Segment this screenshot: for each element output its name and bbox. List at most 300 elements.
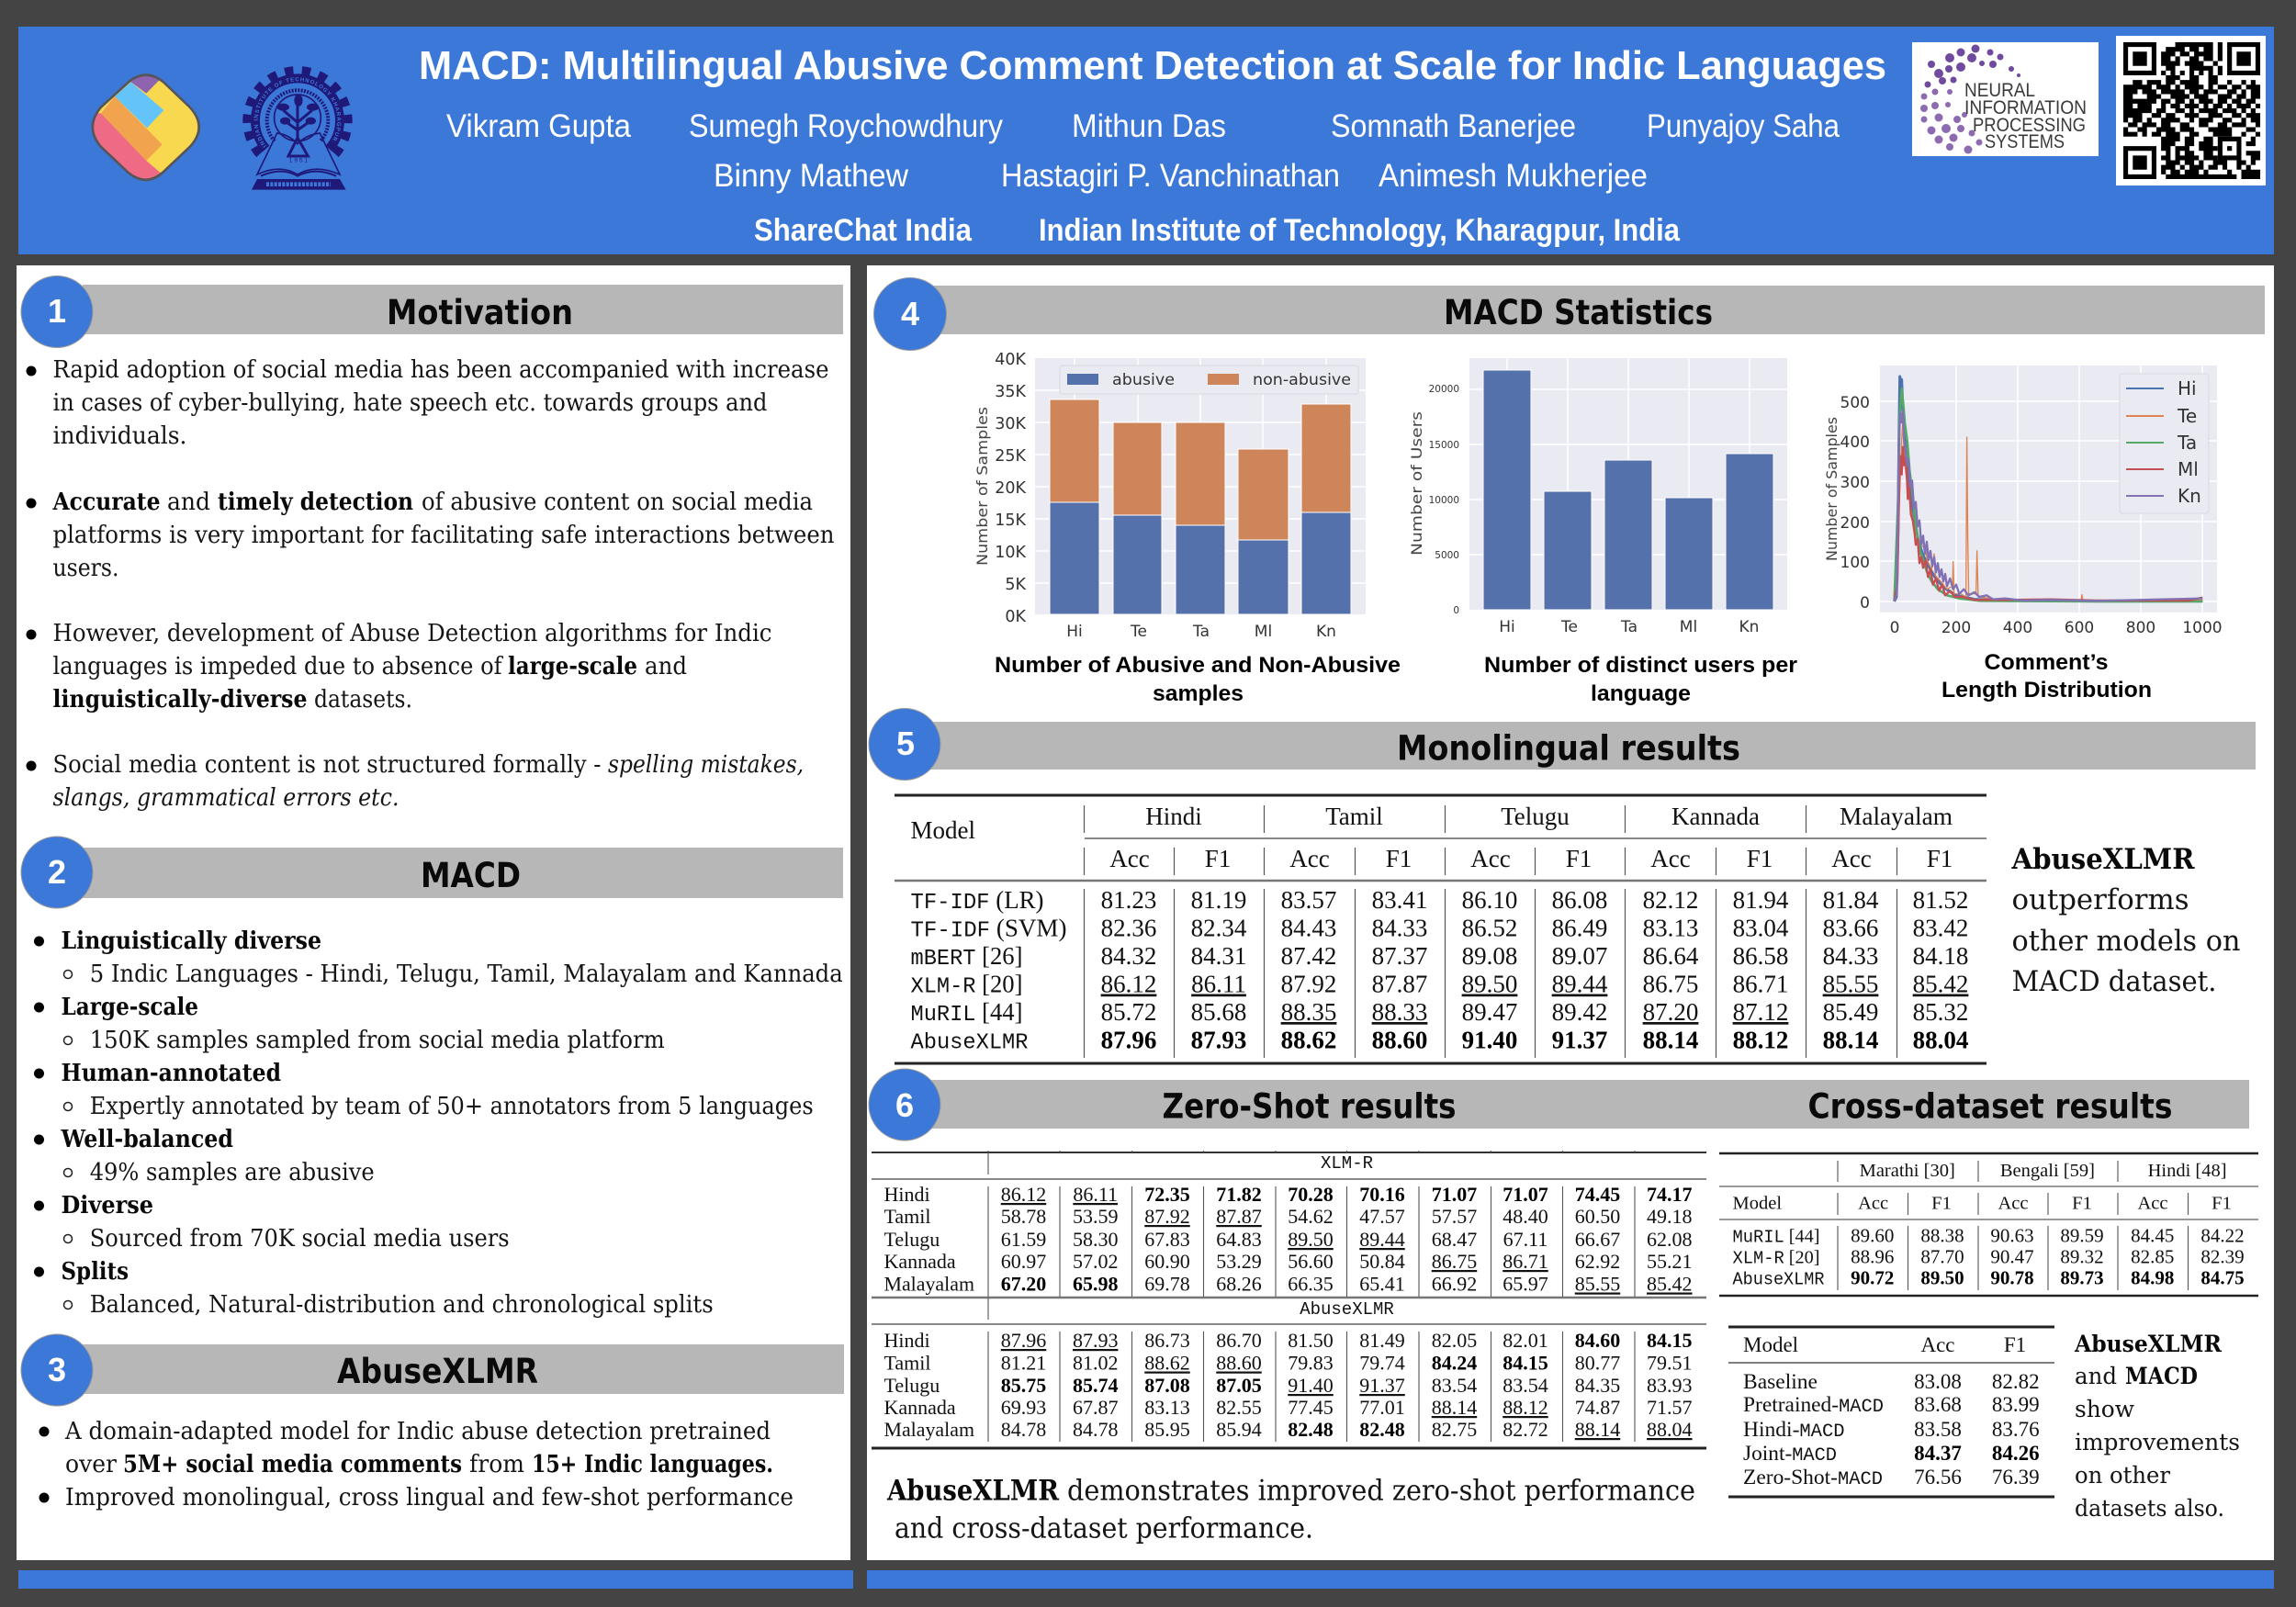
table: zero-shot results: 88.12 (1503, 1396, 1548, 1419)
authors: Vikram Gupta (446, 108, 631, 144)
table: monolingual results: 81.19 (1191, 886, 1246, 914)
chart: distinct users per language: 0 (1453, 605, 1459, 616)
chart: comment length distribution: Number of Samples (1823, 417, 1840, 561)
chart: comment length distribution (1823, 365, 2223, 702)
table: zero-shot results: 77.45 (1288, 1396, 1334, 1419)
MACD properties list: Diverse (61, 1191, 153, 1219)
section 1 heading: 1 (48, 292, 66, 330)
table: zero-shot results: 85.74 (1073, 1374, 1118, 1397)
table: cross-dataset results: AbuseXLMR (1732, 1269, 1824, 1289)
table: monolingual results: 85.32 (1913, 998, 1968, 1026)
motivation bullets: languages is impeded due to absence of (53, 652, 503, 680)
table: zero-shot results: 74.45 (1575, 1183, 1620, 1206)
table: zero-shot results: 58.30 (1073, 1228, 1118, 1251)
table: cross-dataset results: Acc (1998, 1194, 2029, 1214)
table: zero-shot results: 82.48 (1288, 1418, 1334, 1441)
table: zero-shot results: 68.26 (1216, 1273, 1262, 1295)
table: MACD training variants: Pretrained-MACD (1743, 1393, 1884, 1418)
table: zero-shot results: 49.18 (1647, 1205, 1693, 1228)
table: zero-shot results: 91.40 (1288, 1374, 1334, 1397)
table: monolingual results: F1 (1566, 845, 1592, 872)
table: zero-shot results (872, 1151, 1706, 1448)
motivation bullets: Accurate (52, 488, 161, 516)
table: monolingual results: 83.41 (1372, 886, 1427, 914)
table: zero-shot results: 88.04 (1647, 1418, 1693, 1441)
chart: distinct users per language: language (1591, 681, 1691, 706)
table: monolingual results: 87.92 (1281, 970, 1336, 997)
title: MACD: Multilingual Abusive Comment Detection at Scale for Indic Languages (419, 43, 1886, 88)
table: monolingual results (895, 795, 1986, 1063)
chart: distinct users per language: 10000 (1429, 495, 1459, 506)
table: zero-shot results: 60.90 (1144, 1250, 1190, 1273)
chart: distinct users per language: Ml (1680, 618, 1697, 636)
chart: distinct users per language: 5000 (1435, 550, 1459, 561)
table: cross-dataset results: 84.75 (2200, 1267, 2245, 1289)
chart: comment length distribution: 0 (1890, 619, 1899, 637)
table: zero-shot results: 83.93 (1647, 1374, 1693, 1397)
chart: comment length distribution: 400 (1840, 433, 1870, 452)
table: cross-dataset results: Model (1732, 1194, 1782, 1214)
table: zero-shot results: 81.21 (1001, 1352, 1046, 1374)
table: monolingual results: AbuseXLMR (911, 1030, 1029, 1056)
table: monolingual results: 86.52 (1462, 915, 1517, 942)
AbuseXLMR bullets: over (65, 1450, 117, 1478)
table: monolingual results: 84.18 (1913, 942, 1968, 970)
authors: Binny Mathew (714, 158, 909, 194)
table: zero-shot results: 87.92 (1144, 1205, 1190, 1228)
table: monolingual results: F1 (1927, 845, 1953, 872)
table: zero-shot results: 64.83 (1216, 1228, 1262, 1251)
section 2 heading: 2 (48, 853, 66, 891)
authors: Sumegh Roychowdhury (689, 108, 1003, 144)
table: monolingual results: F1 (1747, 845, 1773, 872)
icon: QR code (2116, 36, 2266, 185)
table: zero-shot results: 86.70 (1216, 1329, 1262, 1352)
table: zero-shot results: 54.62 (1288, 1205, 1334, 1228)
AbuseXLMR bullets: 5M+ social media comments (123, 1450, 462, 1478)
table: cross-dataset results: 89.32 (2060, 1245, 2104, 1267)
text: zero-shot takeaway: demonstrates improved zero-shot performance (1067, 1475, 1695, 1508)
chart legend: Ml (2178, 458, 2199, 480)
section 3 heading (21, 1334, 844, 1406)
table: MACD training variants: Zero-Shot-MACD (1743, 1466, 1883, 1490)
text: zero-shot takeaway: AbuseXLMR (886, 1475, 1059, 1508)
panel: right column (867, 265, 2274, 1560)
motivation bullets: and (645, 652, 687, 680)
motivation bullets: of abusive content on social media (422, 488, 813, 516)
table: zero-shot results: 81.50 (1288, 1329, 1334, 1352)
table: zero-shot results: 87.08 (1144, 1374, 1190, 1397)
table: monolingual results: Model (911, 816, 975, 844)
authors: Hastagiri P. Vanchinathan (1001, 158, 1340, 194)
table: zero-shot results: 85.55 (1575, 1273, 1620, 1295)
table: monolingual results: 84.33 (1823, 942, 1878, 970)
table: zero-shot results: 72.35 (1144, 1183, 1190, 1206)
table: monolingual results: Malayalam (1840, 803, 1953, 830)
chart: comment length distribution: 0 (1860, 594, 1870, 612)
chart: abusive and non-abusive samples: samples (1153, 681, 1244, 706)
chart: distinct users per language: Number of distinct users per (1484, 653, 1797, 678)
table: zero-shot results: Tamil (884, 1205, 931, 1228)
section 3 heading: AbuseXLMR (337, 1352, 538, 1391)
table: monolingual results: 87.87 (1372, 970, 1427, 997)
table: zero-shot results: 88.14 (1432, 1396, 1477, 1419)
table: zero-shot results: 74.87 (1575, 1396, 1620, 1419)
table: zero-shot results: 66.35 (1288, 1273, 1334, 1295)
table: MACD training variants: 76.56 (1914, 1466, 1962, 1489)
table: MACD training variants (1728, 1327, 2054, 1497)
table: monolingual results: 85.72 (1101, 998, 1156, 1026)
authors: Punyajoy Saha (1647, 108, 1840, 144)
chart: distinct users per language: Kn (1739, 618, 1759, 636)
authors: Somnath Banerjee (1331, 108, 1576, 144)
icon: NeurIPS logo: NEURAL (1964, 80, 2035, 101)
affiliations (754, 213, 1681, 248)
table: zero-shot results: Telugu (884, 1374, 940, 1397)
chart: abusive and non-abusive samples: 40K (995, 351, 1027, 369)
chart: abusive and non-abusive samples: 15K (995, 511, 1027, 530)
table: zero-shot results: 82.01 (1503, 1329, 1548, 1352)
motivation bullets: linguistically-diverse (53, 685, 307, 714)
table: zero-shot results: 82.55 (1216, 1396, 1262, 1419)
chart: comment length distribution: 300 (1840, 474, 1870, 492)
chart: abusive and non-abusive samples: Ml (1255, 623, 1272, 641)
motivation bullets: Social media content is not structured formally - (53, 750, 601, 779)
motivation bullets: spelling mistakes, (608, 750, 804, 779)
table: monolingual results: 91.37 (1552, 1027, 1607, 1054)
table: zero-shot results: 68.47 (1432, 1228, 1477, 1251)
table: monolingual results: 86.11 (1191, 970, 1246, 997)
table: monolingual results: 82.34 (1191, 915, 1247, 942)
table: zero-shot results: 89.44 (1359, 1228, 1405, 1251)
chart: distinct users per language: 15000 (1429, 440, 1459, 451)
footer bar: left (18, 1570, 853, 1589)
table: monolingual results: 88.14 (1823, 1027, 1878, 1054)
chart: comment length distribution: Length Distribution (1941, 678, 2152, 702)
chart: distinct users per language: 20000 (1429, 384, 1459, 395)
table: MACD training variants: Hindi-MACD (1743, 1418, 1844, 1443)
table: cross-dataset results: 89.50 (1920, 1267, 1964, 1289)
table: zero-shot results: 66.67 (1575, 1228, 1620, 1251)
table: zero-shot results: 60.97 (1001, 1250, 1046, 1273)
table: monolingual results: 88.14 (1643, 1027, 1698, 1054)
table: monolingual results: 88.12 (1733, 1027, 1788, 1054)
table: MACD training variants: Joint-MACD (1743, 1442, 1837, 1467)
chart: abusive and non-abusive samples: Number of Samples (974, 407, 991, 566)
chart: distinct users per language (1408, 358, 1797, 706)
table: monolingual results: 86.58 (1733, 942, 1788, 970)
table: monolingual results: 83.13 (1643, 915, 1698, 942)
chart: comment length distribution: 800 (2126, 619, 2155, 637)
table: zero-shot results: 84.15 (1503, 1352, 1548, 1374)
chart: abusive and non-abusive samples: Hi (1066, 623, 1083, 641)
table: monolingual results: Acc (1470, 845, 1511, 872)
motivation bullets: and (167, 488, 210, 516)
table: monolingual results: 89.08 (1462, 942, 1517, 970)
motivation bullets: platforms is very important for facilitating safe interactions between (53, 521, 834, 549)
table: cross-dataset results: 84.22 (2200, 1225, 2245, 1247)
table: monolingual results: 89.47 (1462, 998, 1517, 1026)
chart: comment length distribution: Comment’s (1984, 650, 2109, 675)
table: zero-shot results: 86.75 (1432, 1250, 1477, 1273)
table: MACD training variants: 84.37 (1914, 1442, 1962, 1465)
table: MACD training variants: Model (1743, 1333, 1798, 1356)
table: zero-shot results: 69.78 (1144, 1273, 1190, 1295)
table: zero-shot results: 71.82 (1216, 1183, 1262, 1206)
table: cross-dataset results: 89.59 (2060, 1225, 2104, 1247)
section 2 heading: MACD (421, 856, 521, 895)
table: cross-dataset results: 82.85 (2131, 1245, 2174, 1267)
chart: comment length distribution: 500 (1840, 394, 1870, 412)
icon: IIT Kharagpur emblem: INDIAN INSTITUTE OF TECHNOLOGY KHARAGPUR (253, 77, 342, 148)
MACD properties list: Large-scale (61, 993, 198, 1021)
table: cross-dataset results: 89.73 (2060, 1267, 2104, 1289)
chart: abusive and non-abusive samples: 0K (1005, 608, 1027, 626)
table: zero-shot results: 65.98 (1073, 1273, 1118, 1295)
MACD properties list: Expertly annotated by team of 50+ annotators from 5 languages (90, 1092, 814, 1120)
table: zero-shot results: 84.15 (1647, 1329, 1693, 1352)
table: zero-shot results: 70.28 (1288, 1183, 1334, 1206)
table: monolingual results: 88.60 (1372, 1027, 1427, 1054)
text: zero-shot takeaway: and cross-dataset performance. (895, 1511, 1313, 1545)
table: monolingual results: 89.42 (1552, 998, 1607, 1026)
chart: abusive and non-abusive samples: Te (1130, 623, 1147, 641)
table: monolingual results: Acc (1289, 845, 1330, 872)
table: zero-shot results: 60.50 (1575, 1205, 1620, 1228)
table: monolingual results: 81.23 (1101, 886, 1156, 914)
table: cross-dataset results: Hindi [48] (2148, 1161, 2227, 1181)
table: monolingual results: XLM-R [20] (911, 970, 1023, 999)
authors: Animesh Mukherjee (1379, 158, 1648, 194)
table: zero-shot results: 57.02 (1073, 1250, 1118, 1273)
table: MACD training variants: 83.58 (1914, 1418, 1962, 1441)
chart legend: Hi (2178, 377, 2197, 399)
table: zero-shot results: Telugu (884, 1228, 940, 1251)
section 6 heading: Cross-dataset results (1807, 1087, 2173, 1126)
table: zero-shot results: 85.94 (1216, 1418, 1262, 1441)
table: zero-shot results: 55.21 (1647, 1250, 1693, 1273)
table: zero-shot results: 67.83 (1144, 1228, 1190, 1251)
chart: abusive and non-abusive samples: 5K (1005, 576, 1027, 594)
table: zero-shot results: Tamil (884, 1352, 931, 1374)
table: monolingual results: mBERT [26] (911, 942, 1023, 972)
section 6 heading: 6 (895, 1086, 914, 1124)
MACD properties list: 150K samples sampled from social media platform (90, 1026, 665, 1054)
table: cross-dataset results: 90.78 (1990, 1267, 2034, 1289)
text: cross-dataset takeaway: show (2075, 1396, 2135, 1422)
table: cross-dataset results: 90.47 (1990, 1245, 2034, 1267)
table: zero-shot results: 88.14 (1575, 1418, 1620, 1441)
table: zero-shot results: 50.84 (1359, 1250, 1405, 1273)
table: MACD training variants: 83.99 (1992, 1393, 2040, 1416)
section 4 heading: MACD Statistics (1444, 293, 1713, 332)
chart: abusive and non-abusive samples: 10K (995, 544, 1027, 562)
table: zero-shot results: 69.93 (1001, 1396, 1046, 1419)
table: monolingual results: Acc (1109, 845, 1150, 872)
table: monolingual results: Telugu (1501, 803, 1570, 830)
table: monolingual results: 86.49 (1552, 915, 1607, 942)
table: monolingual results: 85.55 (1823, 970, 1878, 997)
chart: abusive and non-abusive samples: 30K (995, 415, 1027, 433)
table: cross-dataset results: 84.98 (2131, 1267, 2174, 1289)
table: zero-shot results: 48.40 (1503, 1205, 1548, 1228)
chart legend: abusive (1112, 371, 1175, 389)
table: cross-dataset results: 90.63 (1990, 1225, 2034, 1247)
table: monolingual results: Acc (1650, 845, 1691, 872)
section 1 heading: Motivation (387, 293, 573, 332)
table: zero-shot results: 82.05 (1432, 1329, 1477, 1352)
table: monolingual results: 86.71 (1733, 970, 1788, 997)
AbuseXLMR bullets: from (469, 1450, 524, 1478)
table: monolingual results: TF-IDF (SVM) (911, 915, 1067, 944)
table: cross-dataset results: 88.96 (1851, 1245, 1894, 1267)
section 5 heading (869, 709, 2256, 781)
table: cross-dataset results: 88.38 (1920, 1225, 1964, 1247)
chart: abusive and non-abusive samples (974, 351, 1401, 706)
table: monolingual results: 89.50 (1462, 970, 1517, 997)
table: zero-shot results: 86.12 (1001, 1183, 1046, 1206)
chart legend (2120, 374, 2209, 513)
table: zero-shot results: Malayalam (884, 1273, 974, 1295)
table: monolingual results: 83.66 (1823, 915, 1878, 942)
table: zero-shot results: 85.95 (1144, 1418, 1190, 1441)
table: cross-dataset results: Bengali [59] (2000, 1161, 2095, 1181)
table: monolingual results: 85.49 (1823, 998, 1878, 1026)
MACD properties list (34, 927, 843, 1319)
chart: distinct users per language: Number of Users (1408, 411, 1425, 556)
table: zero-shot results: 74.17 (1647, 1183, 1693, 1206)
chart: abusive and non-abusive samples: 25K (995, 447, 1027, 466)
table: monolingual results: 81.94 (1733, 886, 1789, 914)
table: zero-shot results: 86.11 (1073, 1183, 1118, 1206)
text: monolingual takeaway: MACD dataset. (2011, 965, 2217, 998)
motivation bullets: Rapid adoption of social media has been accompanied with increase (53, 355, 828, 384)
table: MACD training variants: 83.08 (1914, 1370, 1962, 1393)
section 5 heading: Monolingual results (1397, 729, 1740, 768)
text: monolingual takeaway: outperforms (2011, 883, 2189, 916)
table: monolingual results: 85.68 (1191, 998, 1246, 1026)
motivation bullets: timely detection (218, 488, 413, 516)
AbuseXLMR bullets (39, 1417, 793, 1511)
table: monolingual results: 86.10 (1462, 886, 1517, 914)
table: cross-dataset results: Acc (2137, 1194, 2168, 1214)
table: zero-shot results: Malayalam (884, 1418, 974, 1441)
table: zero-shot results: 87.96 (1001, 1329, 1046, 1352)
table: zero-shot results: 83.54 (1432, 1374, 1477, 1397)
table: cross-dataset results: 82.39 (2200, 1245, 2245, 1267)
chart: distinct users per language: Hi (1499, 618, 1515, 636)
chart legend: Ta (2177, 432, 2197, 454)
table: zero-shot results: 87.05 (1216, 1374, 1262, 1397)
icon: NeurIPS logo: INFORMATION (1964, 97, 2087, 118)
text: cross-dataset takeaway (2074, 1331, 2240, 1522)
text: cross-dataset takeaway: and (2075, 1363, 2117, 1389)
chart: comment length distribution: 600 (2065, 619, 2094, 637)
table: monolingual results: 89.44 (1552, 970, 1608, 997)
table: monolingual results: 83.42 (1913, 915, 1968, 942)
table: zero-shot results: Hindi (884, 1183, 930, 1206)
chart: distinct users per language: Ta (1620, 618, 1638, 636)
table: zero-shot results: Kannada (884, 1250, 956, 1273)
table: zero-shot results: XLM-R (1321, 1153, 1373, 1174)
table: zero-shot results: 82.72 (1503, 1418, 1548, 1441)
table: zero-shot results: 79.74 (1359, 1352, 1405, 1374)
motivation bullets: However, development of Abuse Detection algorithms for Indic (53, 619, 771, 647)
table: monolingual results: 81.52 (1913, 886, 1968, 914)
icon: ShareChat logo (91, 73, 200, 182)
text: cross-dataset takeaway: on other (2075, 1462, 2170, 1489)
table: zero-shot results: 82.48 (1359, 1418, 1405, 1441)
motivation bullets (26, 355, 834, 812)
table: monolingual results: 91.40 (1462, 1027, 1517, 1054)
MACD properties list: 49% samples are abusive (90, 1158, 375, 1186)
table: monolingual results: 87.42 (1281, 942, 1336, 970)
MACD properties list: Linguistically diverse (61, 927, 321, 955)
section 4 heading: 4 (901, 295, 919, 332)
table: monolingual results: Kannada (1671, 803, 1760, 830)
table: monolingual results: 86.64 (1643, 942, 1699, 970)
table: monolingual results: 86.08 (1552, 886, 1607, 914)
table: cross-dataset results: 90.72 (1851, 1267, 1894, 1289)
section 2 heading (21, 837, 843, 908)
table: zero-shot results: 65.41 (1359, 1273, 1405, 1295)
panel: left column (17, 265, 850, 1560)
chart: comment length distribution: 400 (2003, 619, 2032, 637)
table: zero-shot results: 86.71 (1503, 1250, 1548, 1273)
table: monolingual results: 87.12 (1733, 998, 1788, 1026)
icon: NeurIPS logo: SYSTEMS (1985, 131, 2065, 152)
table: zero-shot results: 58.78 (1001, 1205, 1046, 1228)
AbuseXLMR bullets: 15+ Indic languages. (532, 1450, 773, 1478)
chart legend (1060, 365, 1358, 394)
footer bar: right (867, 1570, 2274, 1589)
MACD properties list: Balanced, Natural-distribution and chronological splits (90, 1290, 714, 1319)
section 6 heading (869, 1069, 2249, 1141)
table: MACD training variants: 83.68 (1914, 1393, 1962, 1416)
table: zero-shot results: 67.11 (1503, 1228, 1548, 1251)
affiliations: ShareChat India (754, 213, 973, 248)
chart: comment length distribution: 200 (1941, 619, 1971, 637)
table: monolingual results: 85.42 (1913, 970, 1968, 997)
table: zero-shot results: 70.16 (1359, 1183, 1405, 1206)
table: zero-shot results: 67.20 (1001, 1273, 1046, 1295)
chart: abusive and non-abusive samples: 20K (995, 479, 1027, 498)
icon: IIT Kharagpur emblem: 1 9 5 1 (289, 158, 308, 164)
text: monolingual takeaway: AbuseXLMR (2011, 843, 2195, 876)
table: monolingual results: 82.12 (1643, 886, 1698, 914)
table: zero-shot results: 71.57 (1647, 1396, 1693, 1419)
section 1 heading (21, 275, 843, 347)
table: MACD training variants: 82.82 (1992, 1370, 2040, 1393)
table: cross-dataset results: F1 (2212, 1194, 2232, 1214)
chart: comment length distribution: 200 (1840, 514, 1870, 533)
table: monolingual results: 84.33 (1372, 915, 1427, 942)
table: zero-shot results: 53.29 (1216, 1250, 1262, 1273)
table: zero-shot results: 81.02 (1073, 1352, 1118, 1374)
table: monolingual results: Tamil (1325, 803, 1383, 830)
table: monolingual results: 86.75 (1643, 970, 1698, 997)
table: cross-dataset results: 87.70 (1920, 1245, 1964, 1267)
section 5 heading: 5 (896, 725, 915, 762)
table: zero-shot results: 88.60 (1216, 1352, 1262, 1374)
motivation bullets: slangs, grammatical errors etc. (53, 783, 399, 812)
table: zero-shot results: 82.75 (1432, 1418, 1477, 1441)
motivation bullets: in cases of cyber-bullying, hate speech etc. towards groups and (53, 388, 768, 417)
table: zero-shot results: 87.87 (1216, 1205, 1262, 1228)
table: monolingual results: Hindi (1145, 803, 1202, 830)
chart legend: non-abusive (1253, 371, 1351, 389)
table: zero-shot results: 83.54 (1503, 1374, 1548, 1397)
